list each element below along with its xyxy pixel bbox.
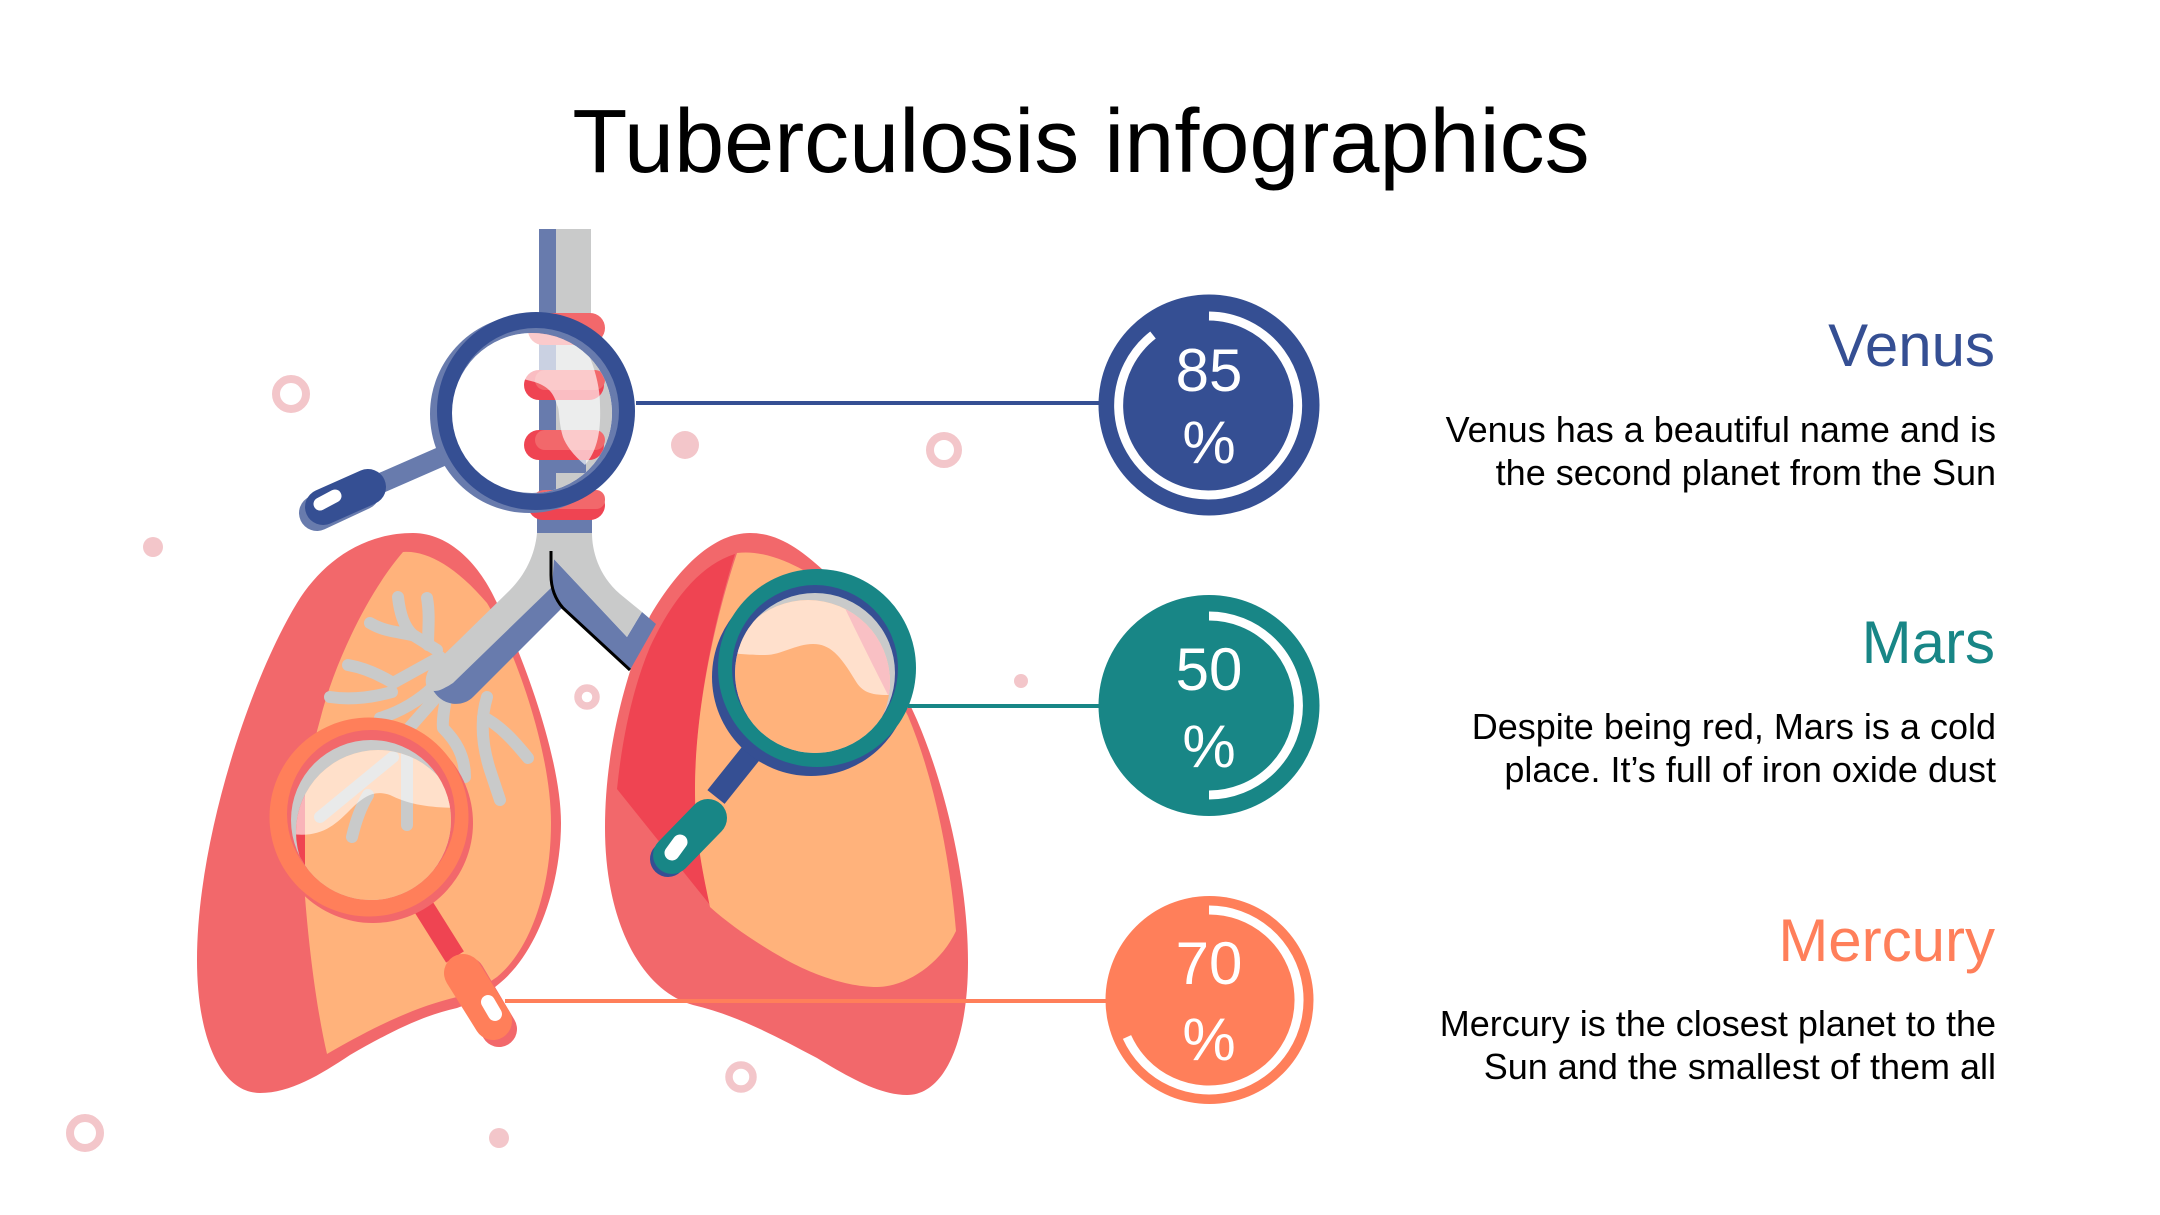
- left lung: [197, 533, 561, 1093]
- text block: Mercury: Sun and the smallest of them all: [1484, 1046, 1996, 1087]
- text block: Mars: place. It’s full of iron oxide dust: [1504, 749, 1996, 790]
- magnifier: trachea (navy): [317, 312, 635, 520]
- connector line: Mars: [908, 704, 1100, 708]
- handle: [317, 455, 445, 513]
- stat: Mercury 70%: %: [1182, 1006, 1236, 1073]
- text block: Mercury: Mercury: [1778, 907, 1995, 974]
- stat: Mercury 70%: 70: [1176, 930, 1242, 997]
- magnifier: right lung (teal): [668, 569, 916, 859]
- connector line: Mercury: [505, 999, 1107, 1003]
- text block: Mercury: [1440, 907, 1996, 1087]
- magnifier: left lung (orange): [270, 718, 499, 1029]
- lens view: [452, 333, 612, 493]
- stat: Mars 50%: 50: [1176, 636, 1242, 703]
- text block: Mercury: Mercury is the closest planet to the: [1440, 1003, 1996, 1044]
- text block: Venus: the second planet from the Sun: [1496, 452, 1996, 493]
- stat: Mercury 70%: [1106, 896, 1314, 1104]
- text block: Mars: [1472, 609, 1996, 790]
- trachea and bronchi: [426, 229, 656, 704]
- left bronchus: [426, 533, 556, 691]
- text block: Mars: Mars: [1862, 609, 1995, 676]
- text block: Venus: Venus: [1828, 312, 1995, 379]
- stat: Venus 85%: [1098, 294, 1320, 516]
- stat: Mars 50%: %: [1182, 713, 1236, 780]
- handle: [668, 752, 752, 859]
- text block: Venus: [1446, 312, 1996, 493]
- connector line: Venus: [636, 401, 1100, 405]
- handle: [423, 906, 499, 1029]
- lens view: [291, 740, 451, 900]
- red cartilage rings behind top lens: [528, 313, 605, 520]
- stat: Venus 85%: %: [1182, 409, 1236, 476]
- bronchial branches in left lung: [330, 597, 528, 800]
- decorative pink dots and rings: [70, 379, 1028, 1148]
- text block: Venus: Venus has a beautiful name and is: [1446, 409, 1996, 450]
- text block: Mars: Despite being red, Mars is a cold: [1472, 706, 1996, 747]
- right lung: [605, 533, 968, 1095]
- right bronchus: [552, 557, 656, 670]
- lens view: [735, 593, 895, 753]
- stat: Venus 85%: 85: [1176, 337, 1242, 404]
- stat: Mars 50%: [1098, 595, 1320, 816]
- title: Tuberculosis infographics: [572, 92, 1590, 192]
